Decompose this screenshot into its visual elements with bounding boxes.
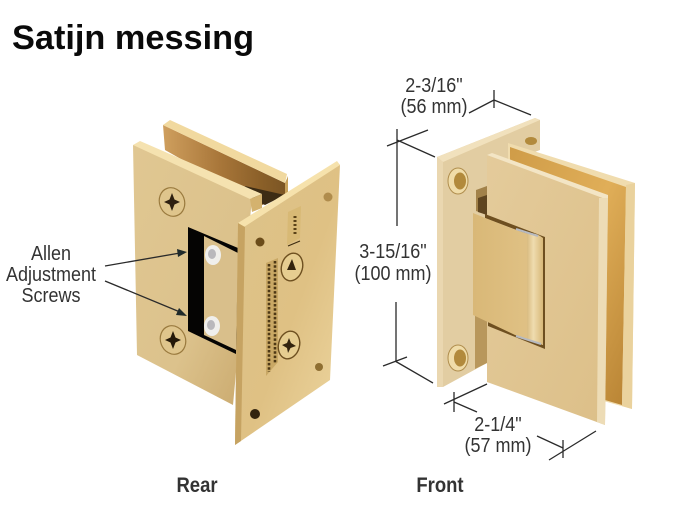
allen screw top [205,245,221,265]
rear right plate [235,161,340,445]
dimension: 2-3/16 inch [401,75,531,118]
front plate [485,153,608,425]
allen screw bottom [204,316,220,336]
dimension: 2-1/4 inch [444,384,596,460]
caption: rear: Rear [176,474,218,497]
front hinge barrel [473,213,543,345]
dimension: 2-1/4 inch: (57 mm) [465,435,531,457]
caption: front: Front [416,474,464,497]
hinge recess shadow [485,214,545,349]
screw visible at plate top [525,137,537,145]
rear adjustment cut-out [188,227,238,354]
engraved label short [287,206,301,245]
small holes [250,192,332,419]
front back clamp plate [508,143,635,409]
rear inner plate [204,236,238,350]
wall plate screw bottom [448,345,468,371]
allen adjustment screws label: Adjustment [6,264,97,286]
title: Satijn messing [12,19,254,57]
dimension: 2-3/16 inch: 2-3/16" [405,75,463,97]
rear screw bottom-left [156,322,190,358]
dimension: 3-15/16 inch: (100 mm) [355,263,431,285]
dimension: 3-15/16 inch [355,129,435,383]
dimension: 2-1/4 inch: 2-1/4" [474,414,522,436]
arrow: lower screw [105,281,187,316]
dimension: 2-3/16 inch: (56 mm) [401,96,467,118]
arrow: upper screw [105,249,187,266]
rear back clamp plate [163,120,288,205]
right plate screws [275,251,306,361]
front hinge [437,118,635,425]
allen adjustment screws label: Screws [22,285,80,307]
engraved text [269,261,275,372]
allen adjustment screws label [6,243,97,307]
rear screw top-left [155,184,189,220]
front wall plate [437,118,540,387]
wall plate screw top [448,168,468,194]
dimension: 3-15/16 inch: 3-15/16" [359,241,427,263]
rear hinge [133,120,340,445]
engraved label long [266,258,278,376]
rear left plate [133,141,262,405]
allen adjustment screws label: Allen [31,243,71,265]
